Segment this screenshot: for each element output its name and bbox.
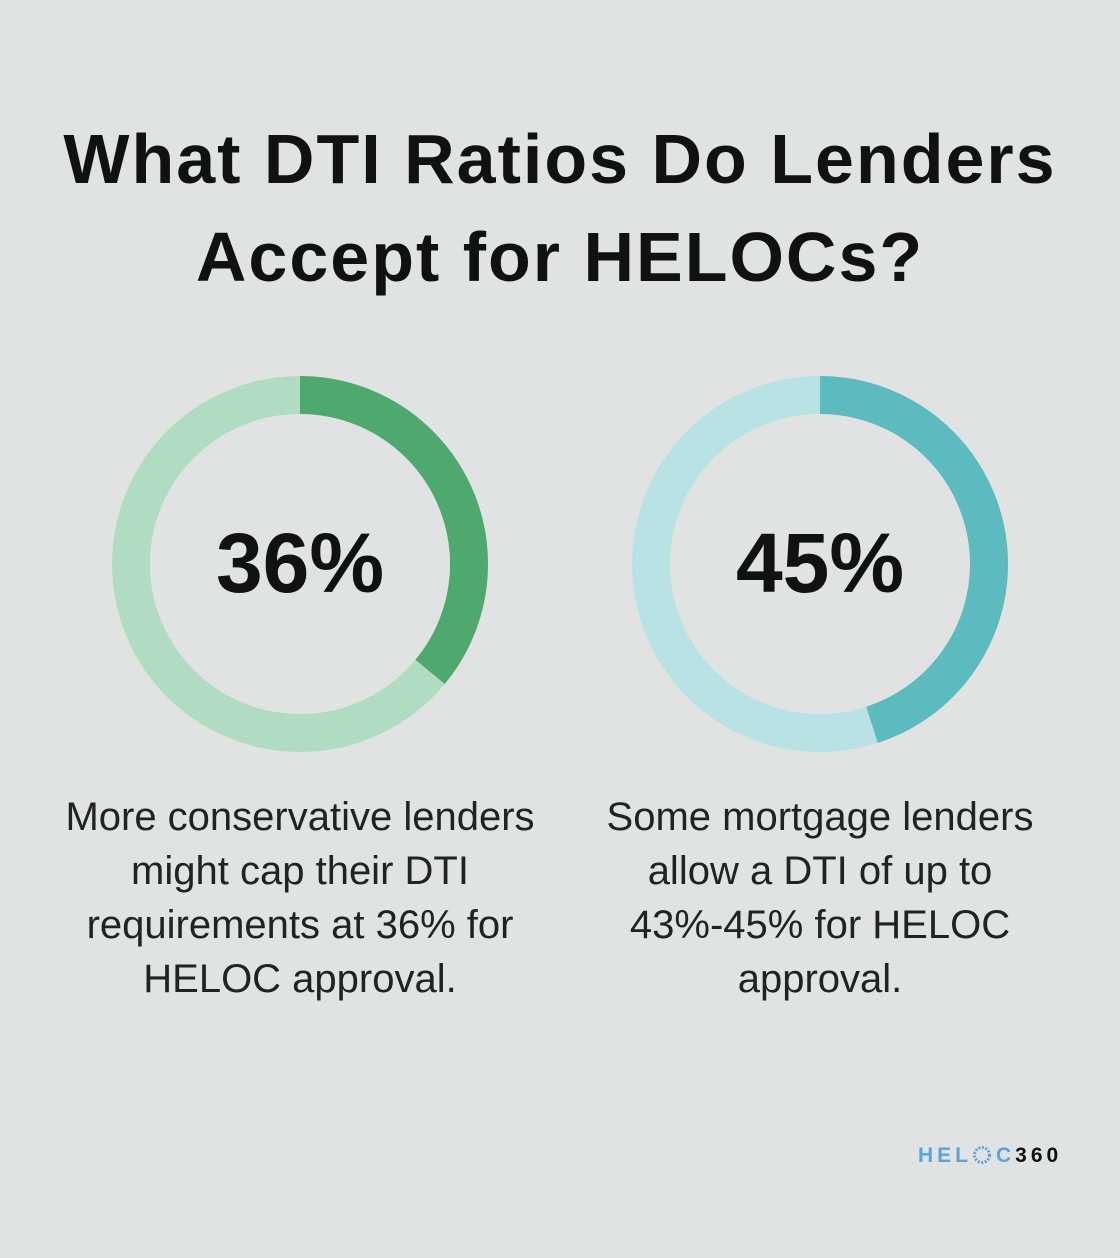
donut chart: 36% <box>112 376 488 752</box>
caption: conservative lenders: More conservative lenders <box>65 795 535 839</box>
title: Accept for HELOCs? <box>196 218 924 296</box>
caption: mortgage lenders: Some mortgage lenders <box>607 795 1033 839</box>
caption: conservative lenders <box>65 795 535 1001</box>
caption: conservative lenders: HELOC approval. <box>143 957 457 1001</box>
caption: mortgage lenders: allow a DTI of up to <box>648 849 992 893</box>
donut chart: 45%: 45% <box>736 516 904 610</box>
logo: HEL C360 <box>918 1144 1062 1167</box>
caption: conservative lenders: might cap their DTI <box>131 849 469 893</box>
donut chart: 45% <box>632 376 1008 752</box>
title <box>63 120 1057 296</box>
caption: mortgage lenders: 43%-45% for HELOC <box>630 903 1010 947</box>
caption: mortgage lenders <box>607 795 1033 1001</box>
donut chart: 36%: 36% <box>216 516 384 610</box>
caption: conservative lenders: requirements at 36% for <box>87 903 513 947</box>
caption: mortgage lenders: approval. <box>738 957 902 1001</box>
title: What DTI Ratios Do Lenders <box>63 120 1057 198</box>
